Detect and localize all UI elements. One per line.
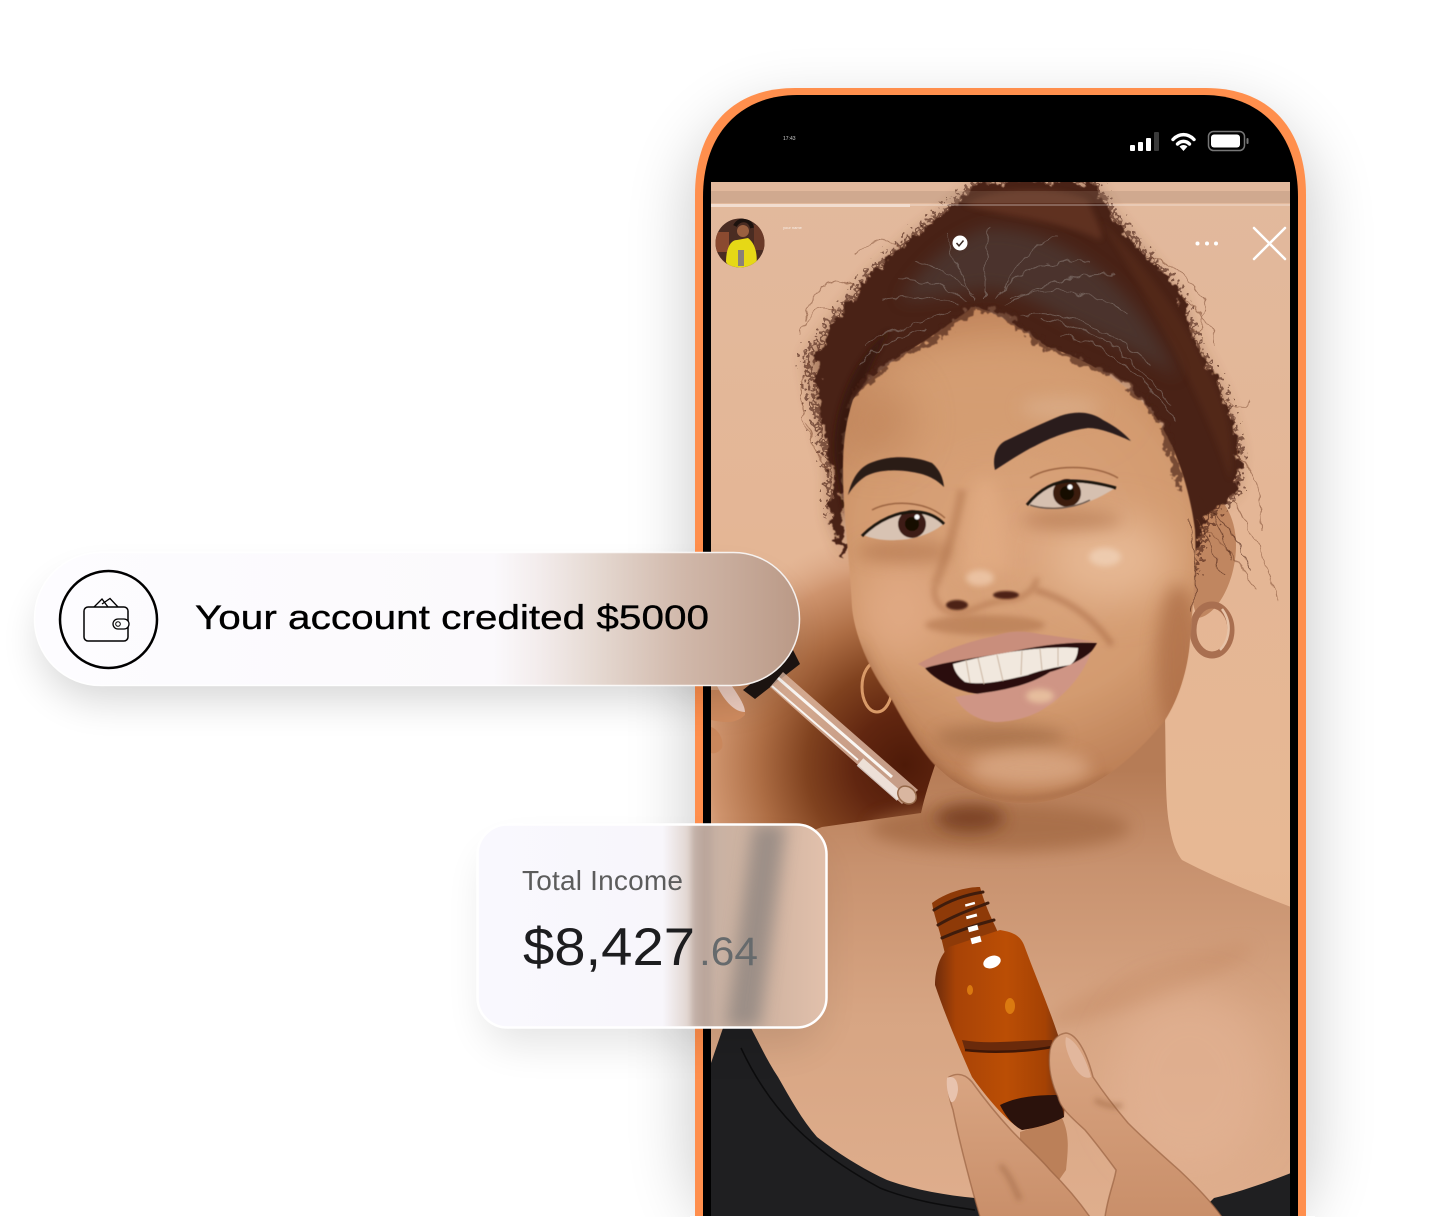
dropper hand fingers	[711, 686, 745, 753]
phone black bezel	[703, 95, 1298, 1217]
bottle glints	[967, 985, 1015, 1014]
income card shadow	[485, 850, 820, 1045]
icon: battery	[1208, 132, 1248, 150]
below lip shade	[935, 725, 1065, 751]
icon: wallet in circle	[60, 571, 157, 668]
notification card	[34, 552, 800, 686]
face base	[843, 307, 1195, 803]
icon: close	[1254, 228, 1285, 259]
story progress bar track	[711, 204, 1290, 206]
wisps over ear	[1190, 495, 1250, 612]
index nail	[947, 1077, 958, 1102]
icon: signal bars	[1130, 132, 1159, 151]
left eye	[862, 503, 945, 540]
dropper tip	[894, 782, 920, 808]
story progress bar active	[711, 204, 910, 207]
story progress band	[711, 191, 1290, 203]
grey hair sheen	[900, 228, 1178, 378]
lower lip	[955, 652, 1091, 722]
bottle base dark	[1000, 1095, 1064, 1130]
right jaw shade	[1156, 585, 1200, 735]
index finger	[948, 1075, 1090, 1217]
upper lip shade	[925, 615, 1045, 635]
dark background behind neck	[711, 554, 936, 830]
teeth	[953, 647, 1078, 683]
right cheek	[1048, 518, 1172, 602]
icon: more dots	[1196, 242, 1218, 246]
hairline wisps	[853, 307, 1180, 490]
icon: verified badge	[952, 236, 968, 250]
bottom white edge	[690, 1216, 1315, 1217]
amber bottle	[932, 887, 1065, 1130]
mouth interior	[925, 643, 1097, 695]
hair mass	[816, 182, 1239, 610]
mouth	[918, 632, 1097, 722]
nose side shadow	[935, 490, 962, 585]
holding hand	[947, 1033, 1222, 1217]
bottle body	[935, 930, 1065, 1130]
middle finger	[1020, 1118, 1068, 1200]
knuckle creases	[1000, 1100, 1122, 1200]
chin lower edge	[950, 775, 1110, 799]
blurred reflection stripes	[692, 824, 786, 1028]
eye socket shade left	[857, 541, 953, 563]
income card body	[477, 824, 827, 1028]
neck and collarbone shading	[870, 804, 1270, 1170]
upper lip	[918, 632, 1097, 668]
earring right	[1193, 605, 1231, 655]
bottle highlights	[965, 902, 1003, 971]
left brow	[848, 457, 944, 495]
icon: wifi	[1173, 135, 1194, 151]
eye socket shade right	[1022, 510, 1122, 530]
nose	[934, 570, 1037, 612]
income cents: .64	[699, 930, 758, 974]
reddish outer hair	[1130, 258, 1228, 456]
oil band	[962, 1040, 1052, 1052]
photo background	[711, 182, 1290, 907]
lip highlight	[1026, 689, 1054, 703]
notification card body	[34, 552, 800, 686]
thumb	[1049, 1033, 1222, 1217]
brow bone highlight	[1028, 396, 1092, 419]
neck thread shadow	[934, 892, 994, 938]
smile fold	[1035, 590, 1112, 645]
income amount: $8,427	[523, 918, 695, 977]
story photo	[670, 182, 1291, 1217]
status time: 17:43	[783, 136, 796, 142]
forehead top shade	[857, 387, 910, 453]
hair	[800, 182, 1278, 610]
left cheek	[860, 562, 940, 658]
flyaway hairs	[800, 241, 1278, 600]
neck and chest skin	[711, 720, 1290, 1123]
nose bridge	[974, 498, 987, 559]
glass reflections	[772, 678, 900, 797]
ear	[1192, 504, 1236, 618]
oil line	[965, 1047, 1052, 1052]
dropper	[743, 650, 920, 808]
right brow	[994, 413, 1131, 470]
income card border	[478, 824, 826, 1028]
cheek highlight	[1089, 548, 1121, 566]
phone orange frame	[695, 88, 1306, 1217]
thumb nail	[1065, 1037, 1091, 1078]
hair wisps around edge	[807, 182, 1238, 570]
story username: your name	[783, 225, 803, 230]
face shading	[845, 345, 1200, 810]
glass tube	[770, 672, 918, 804]
bun shade	[965, 190, 1101, 240]
right eye	[1027, 468, 1118, 508]
card edge highlight	[34, 552, 800, 686]
face	[843, 307, 1250, 810]
story avatar	[715, 218, 766, 268]
phone mockup	[670, 88, 1306, 1217]
notification text: Your account credited $5000	[195, 599, 709, 637]
phone drop shadow	[690, 110, 1312, 1217]
earring left	[862, 662, 892, 712]
income card	[477, 824, 827, 1028]
tooth gaps	[966, 648, 1058, 684]
wallet card shadow	[40, 580, 790, 700]
bottle neck	[932, 887, 1001, 958]
status bar	[783, 132, 1248, 151]
jaw shade left	[862, 644, 959, 782]
hair soft halo	[807, 182, 1238, 560]
income label: Total Income	[522, 865, 683, 896]
chin highlight	[970, 750, 1090, 786]
black top	[711, 1028, 1291, 1217]
hair strands	[860, 225, 1175, 420]
forehead tone	[849, 335, 1065, 414]
left side hair dark	[832, 338, 884, 518]
dropper black cap	[743, 650, 800, 699]
